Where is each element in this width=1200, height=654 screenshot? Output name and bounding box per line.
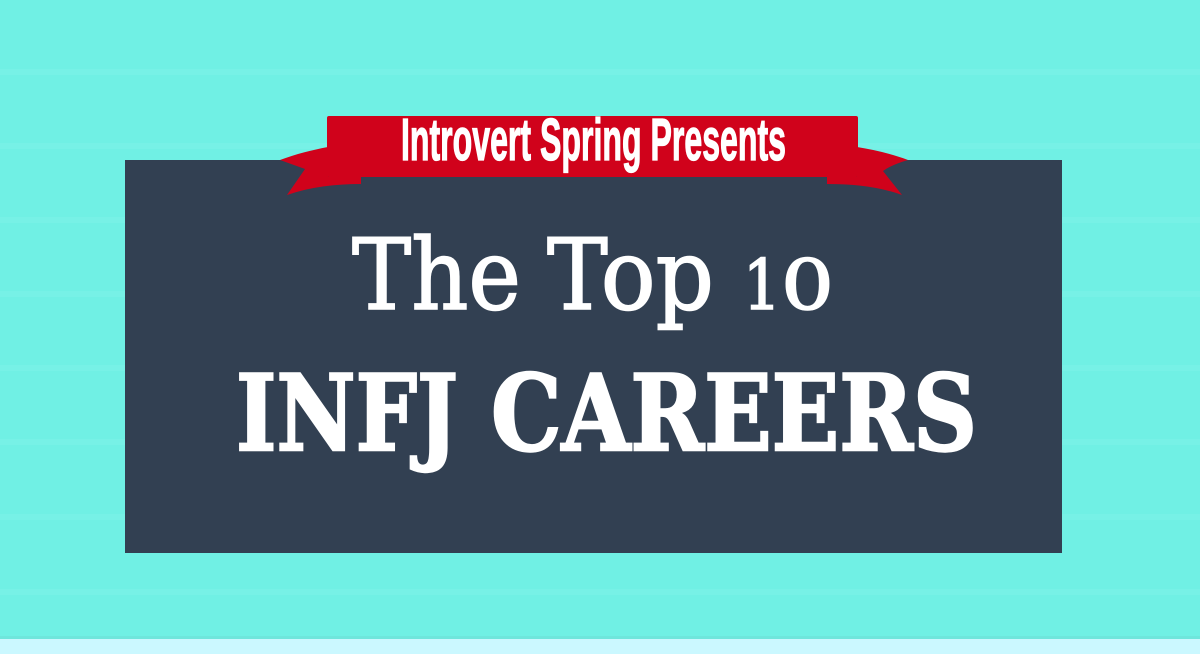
title line two: INFJ <box>236 351 458 475</box>
ribbon banner <box>280 107 908 195</box>
title line one: Top <box>547 219 714 333</box>
ribbon text: Introvert Spring Presents <box>401 107 786 173</box>
title line two: CAREERS <box>491 351 977 475</box>
title panel <box>125 160 1062 553</box>
ribbon right tail <box>827 147 908 195</box>
title line two <box>236 351 977 475</box>
ribbon body <box>327 116 858 177</box>
ribbon left tail <box>280 147 361 195</box>
bottom pale band <box>0 639 1200 654</box>
title line one: 1 <box>743 246 781 326</box>
title line one <box>352 219 834 333</box>
title line one: The <box>352 219 521 333</box>
title line one: 0 <box>781 246 834 326</box>
